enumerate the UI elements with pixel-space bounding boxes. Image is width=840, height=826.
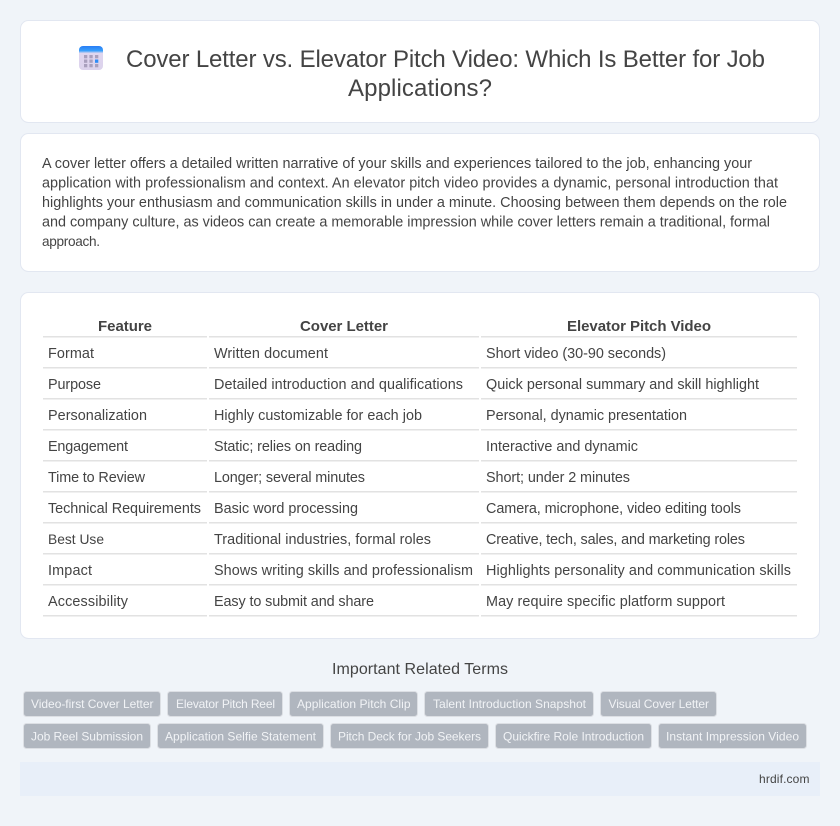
text block: intro: A cover letter offers a detailed written narrative of your skills and experiences tailored to the job, enhancing your <box>42 156 752 172</box>
row: Time to Review: Longer; several minutes <box>214 470 365 486</box>
row: Format <box>43 346 797 368</box>
tag: Video-first Cover Letter <box>31 697 154 711</box>
text block: intro: highlights your enthusiasm and communication skills in under a minute. Choosing between them depends on the role <box>42 195 787 211</box>
table header row <box>43 318 797 338</box>
row: Format: Short video (30-90 seconds) <box>486 346 666 362</box>
row: Purpose: Purpose <box>48 377 101 393</box>
footer bar <box>20 762 820 796</box>
row: Engagement: Engagement <box>48 439 128 455</box>
tag: Application Pitch Clip <box>297 697 411 711</box>
row: Accessibility <box>43 594 797 616</box>
tag <box>424 692 594 716</box>
icon: calendar <box>79 46 103 70</box>
row: Format: Format <box>48 346 94 362</box>
tag <box>24 692 160 716</box>
row: Technical Requirements: Basic word processing <box>214 501 358 517</box>
tag: Pitch Deck for Job Seekers <box>338 730 481 744</box>
row: Accessibility: Accessibility <box>48 594 129 610</box>
row: Accessibility: Easy to submit and share <box>214 594 374 610</box>
table header row: Cover Letter <box>300 318 388 335</box>
text block: intro: application with professionalism and context. An elevator pitch video provides a dynamic, personal introduction that <box>42 176 778 192</box>
text block: intro <box>42 156 787 249</box>
tag <box>158 724 324 748</box>
row: Impact: Impact <box>48 563 92 579</box>
tag <box>496 724 652 748</box>
row: Purpose <box>43 377 797 400</box>
row: Technical Requirements: Technical Requirements <box>48 501 201 517</box>
tag: Visual Cover Letter <box>608 697 709 711</box>
heading: related terms: Important Related Terms <box>332 661 508 678</box>
text block: intro: and company culture, as videos can create a memorable impression while cover letters remain a traditional, formal <box>42 214 770 230</box>
tag: Quickfire Role Introduction <box>503 730 644 744</box>
title: Applications? <box>348 75 492 102</box>
row: Best Use: Best Use <box>48 532 104 547</box>
row: Best Use: Traditional industries, formal roles <box>214 532 431 548</box>
tag <box>290 692 418 716</box>
row: Impact: Highlights personality and communication skills <box>486 563 791 579</box>
tag list: related terms <box>24 692 806 748</box>
tag <box>600 692 716 716</box>
row: Time to Review: Time to Review <box>48 470 146 486</box>
panel: intro paragraph <box>20 134 820 272</box>
row: Personalization <box>43 408 797 430</box>
table header row: Feature <box>98 318 152 335</box>
row: Purpose: Detailed introduction and qualifications <box>214 377 463 393</box>
tag <box>168 692 282 716</box>
tag: Instant Impression Video <box>666 730 799 744</box>
row: Engagement <box>43 439 797 462</box>
row: Impact: Shows writing skills and professionalism <box>214 563 473 579</box>
tag <box>658 724 806 748</box>
row: Impact <box>43 563 797 586</box>
row: Engagement: Static; relies on reading <box>214 439 362 455</box>
row: Engagement: Interactive and dynamic <box>486 439 638 455</box>
tag: Job Reel Submission <box>31 730 143 744</box>
table header row: Elevator Pitch Video <box>567 318 711 335</box>
tag <box>24 724 150 748</box>
row: Technical Requirements <box>43 501 797 524</box>
panel: comparison table <box>20 292 820 638</box>
footer source text: hrdif.com <box>759 772 810 786</box>
title <box>126 46 765 102</box>
tag: Talent Introduction Snapshot <box>433 697 587 711</box>
row: Technical Requirements: Camera, microphone, video editing tools <box>486 501 741 517</box>
row: Best Use: Creative, tech, sales, and marketing roles <box>486 532 745 548</box>
row: Time to Review: Short; under 2 minutes <box>486 470 630 486</box>
row: Personalization: Personalization <box>48 408 147 424</box>
row: Personalization: Personal, dynamic presentation <box>486 408 687 424</box>
row: Format: Written document <box>214 346 328 362</box>
row: Accessibility: May require specific platform support <box>486 594 725 610</box>
tag: Elevator Pitch Reel <box>176 697 275 711</box>
tag: Application Selfie Statement <box>165 730 317 744</box>
row: Personalization: Highly customizable for each job <box>214 408 422 424</box>
title: Cover Letter vs. Elevator Pitch Video: Which Is Better for Job <box>126 46 765 73</box>
panel: title card <box>20 20 820 122</box>
row: Time to Review <box>43 470 797 492</box>
tag <box>330 724 488 748</box>
text block: intro: approach. <box>42 234 100 249</box>
row: Best Use <box>43 532 797 554</box>
row: Purpose: Quick personal summary and skill highlight <box>486 377 759 393</box>
